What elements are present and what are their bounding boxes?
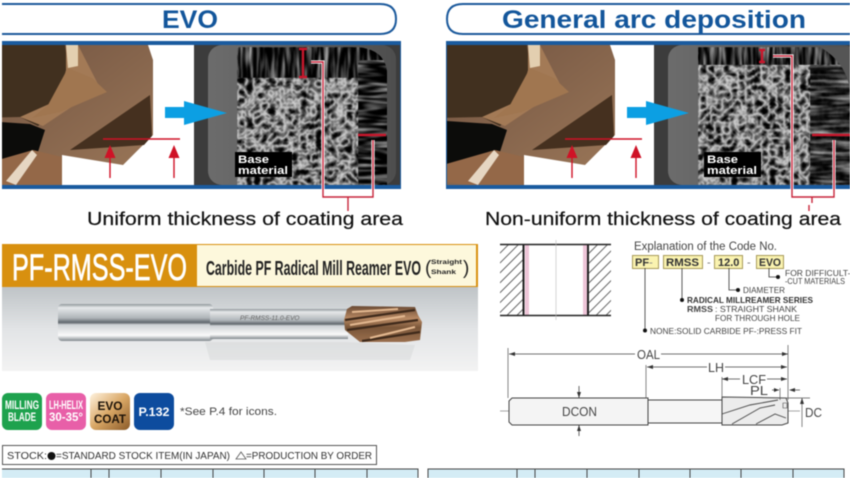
label: base material: material: [238, 165, 288, 177]
red thickness arrows: [103, 139, 180, 178]
panel: General arc deposition: [432, 4, 850, 229]
dimension: LCF: [722, 373, 787, 387]
caption: non-uniform thickness: Non-uniform thickness of coating area: [485, 209, 842, 229]
code number explanation: RMSS: [687, 304, 713, 314]
red thickness arrows: [565, 139, 642, 178]
heading: EVO: EVO: [162, 6, 218, 34]
product banner: ): [463, 258, 469, 279]
dimension: LH: [647, 361, 787, 375]
icon: page reference: [134, 393, 174, 430]
code leaders: [645, 268, 778, 330]
label: base material: Base: [238, 154, 269, 166]
dimension: PL: PL: [750, 384, 768, 398]
code box: PF: PF-: [635, 257, 653, 269]
caption: uniform thickness: Uniform thickness of coating area: [87, 209, 404, 229]
blue arrow: [627, 101, 689, 125]
icon row: [2, 393, 277, 430]
micrograph: EVO: [237, 47, 388, 185]
dimension: DCON: [560, 386, 599, 436]
code number explanation: FOR THROUGH HOLE: [715, 313, 800, 323]
table header: right: [428, 469, 844, 478]
dimension: DC: [800, 398, 822, 420]
icon: LH helix: [46, 393, 86, 430]
dimension: LH: LH: [708, 361, 724, 375]
product banner: Carbide PF Radical Mill Reamer EVO: [206, 258, 421, 280]
coating photo frame: [432, 41, 850, 189]
icon: milling blade: BLADE: [8, 410, 36, 424]
stock legend: [2, 446, 376, 464]
code box: RMSS: RMSS: [666, 257, 699, 269]
micrograph: general arc: [698, 47, 850, 185]
blue arrow: [165, 101, 227, 125]
stock legend: =PRODUCTION BY ORDER: [246, 451, 372, 462]
label: base material: material: [707, 165, 757, 177]
diagram: reamer dimensions: [500, 345, 822, 436]
diagram: press-fit hole section: [500, 240, 611, 320]
icon: LH helix: 30-35°: [49, 412, 83, 424]
icon: EVO coat: [90, 393, 130, 430]
product banner: PF-RMSS-EVO: [12, 247, 187, 288]
icon: page reference: P.132: [138, 405, 170, 419]
product banner: Shank: [431, 269, 456, 276]
code number explanation: -: [747, 257, 751, 269]
leader lines: [773, 56, 834, 203]
code number explanation: : STRAIGHT SHANK: [715, 304, 797, 314]
code box: PF: [632, 256, 658, 269]
icon: EVO coat: COAT: [94, 412, 127, 426]
icon: milling blade: MILLING: [5, 398, 39, 412]
dimension: OAL: [509, 348, 788, 362]
coating photo frame: [0, 41, 401, 189]
stock legend: =STANDARD STOCK ITEM(IN JAPAN): [56, 451, 230, 462]
stock legend: STOCK:: [7, 451, 47, 462]
label: base material: [704, 152, 761, 177]
heading: General arc deposition: [447, 4, 850, 34]
code box: diameter: 12.0: [718, 257, 739, 269]
extension lines: [508, 345, 810, 427]
icon: LH helix: LH-HELIX: [49, 400, 83, 412]
dimension: OAL: OAL: [637, 348, 660, 362]
product banner: (: [425, 258, 432, 279]
dimension: DC: DC: [805, 406, 822, 420]
product photo: reamer: PF-RMSS-11.0-EVO: [240, 315, 299, 322]
label: base material: [235, 152, 292, 177]
cutting head: [344, 306, 422, 342]
code box: EVO: EVO: [759, 257, 781, 269]
table header: left: [2, 469, 418, 478]
product banner: Straight: [431, 259, 463, 266]
code number explanation: Explanation of the Code No.: [634, 241, 777, 253]
heading: General arc deposition: General arc deposition: [502, 6, 806, 34]
product banner: [2, 244, 478, 288]
dimension: PL: [750, 384, 800, 398]
leader lines: [311, 62, 373, 211]
icon: EVO coat: EVO: [98, 399, 122, 413]
panel: EVO: [0, 4, 404, 229]
code number explanation: -: [707, 257, 711, 269]
icon: milling blade: [2, 393, 42, 430]
code number explanation: [632, 241, 850, 336]
dimension: LCF: LCF: [742, 373, 766, 387]
code box: diameter: [714, 256, 742, 269]
product photo: reamer: [2, 287, 478, 371]
dimension: DCON: DCON: [562, 405, 597, 419]
tool outline: [500, 397, 800, 425]
label: base material: Base: [707, 154, 738, 166]
code number explanation: RADICAL MILLREAMER SERIES: [687, 295, 813, 305]
code number explanation: NONE:SOLID CARBIDE PF-:PRESS FIT: [650, 326, 802, 336]
heading: EVO: [2, 4, 396, 34]
code number explanation: DIAMETER: [743, 285, 785, 295]
note: *See P.4 for icons.: [180, 406, 277, 418]
